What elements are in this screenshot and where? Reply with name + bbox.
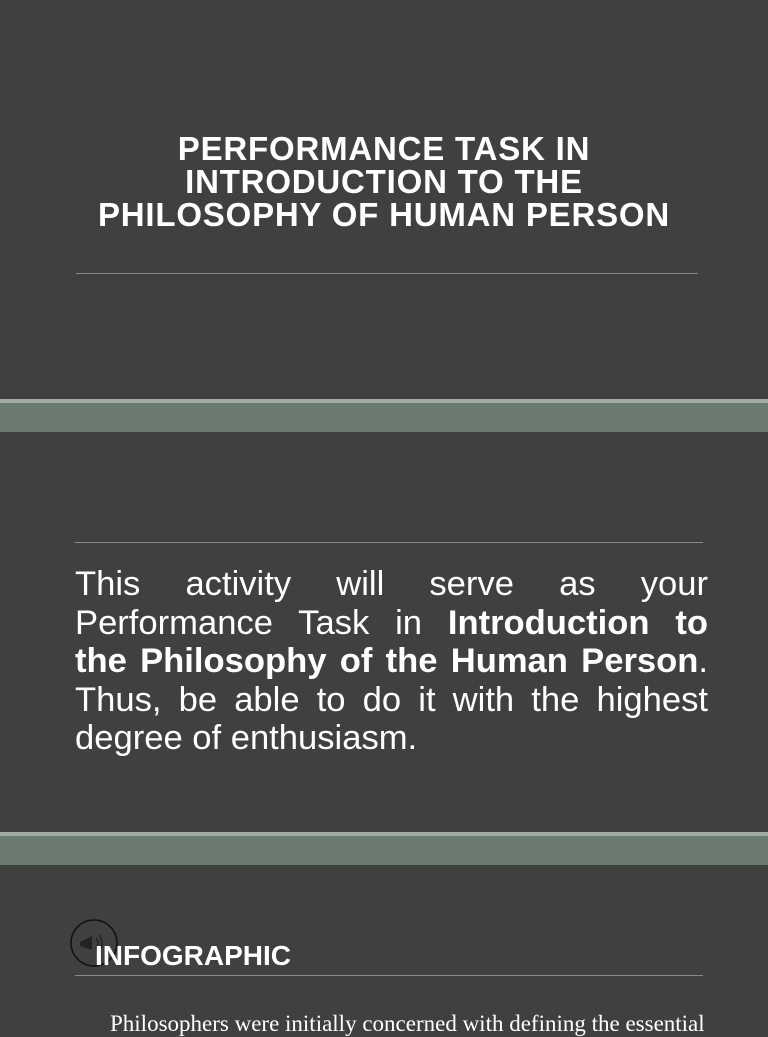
title: PERFORMANCE TASK IN bbox=[178, 130, 590, 167]
band divider 1 bbox=[0, 399, 768, 432]
intro paragraph: Thus, be able to do it with the highest bbox=[75, 680, 708, 718]
icon: megaphone bbox=[70, 919, 118, 967]
intro paragraph: the Philosophy of the Human Person. bbox=[75, 642, 708, 680]
intro paragraph bbox=[75, 565, 708, 757]
body text: Philosophers were initially concerned with defining the essential bbox=[110, 1011, 705, 1036]
intro paragraph: degree of enthusiasm. bbox=[75, 719, 417, 757]
heading: infographic: INFOGRAPHIC bbox=[95, 940, 291, 971]
title bbox=[98, 130, 670, 233]
intro paragraph: This activity will serve as your bbox=[75, 565, 708, 603]
intro paragraph: Performance Task in Introduction to bbox=[75, 604, 708, 642]
title: PHILOSOPHY OF HUMAN PERSON bbox=[98, 196, 670, 233]
band divider 2 bbox=[0, 832, 768, 865]
title: INTRODUCTION TO THE bbox=[185, 163, 583, 200]
